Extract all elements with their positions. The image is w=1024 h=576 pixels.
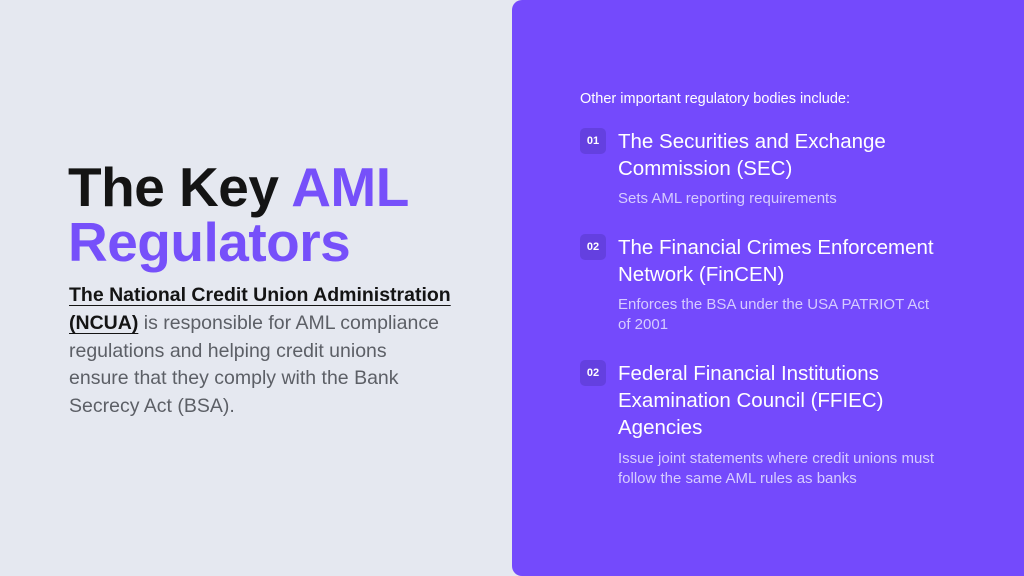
text block: NCUA description: The National Credit Union Administration (NCUA) is responsible for AML compliance regulations and helping credit unions ensure that they comply with the Bank Secrecy Act (BSA).	[69, 284, 451, 417]
item: FinCEN: The Financial Crimes Enforcement Network (FinCEN)	[618, 236, 934, 286]
item: SEC: 01	[587, 135, 599, 147]
item: FinCEN	[580, 234, 934, 333]
item: FFIEC	[580, 360, 934, 487]
title	[68, 156, 409, 273]
item: SEC	[580, 128, 886, 207]
panel: right	[512, 0, 1024, 576]
title: Regulators	[68, 211, 350, 273]
item: FFIEC: Issue joint statements where credit unions must follow the same AML rules as banks	[618, 450, 934, 487]
item: FinCEN: 02	[587, 241, 599, 253]
item: SEC: The Securities and Exchange Commission (SEC)	[618, 130, 886, 180]
item: FFIEC: Federal Financial Institutions Examination Council (FFIEC) Agencies	[618, 362, 883, 439]
item: FinCEN: Enforces the BSA under the USA PATRIOT Act of 2001	[618, 296, 929, 333]
item: FFIEC: 02	[587, 367, 599, 379]
heading: other bodies: Other important regulatory bodies include:	[580, 91, 850, 107]
item: SEC: Sets AML reporting requirements	[618, 190, 837, 207]
panel: left	[0, 0, 512, 576]
title: The Key AML	[68, 156, 409, 218]
